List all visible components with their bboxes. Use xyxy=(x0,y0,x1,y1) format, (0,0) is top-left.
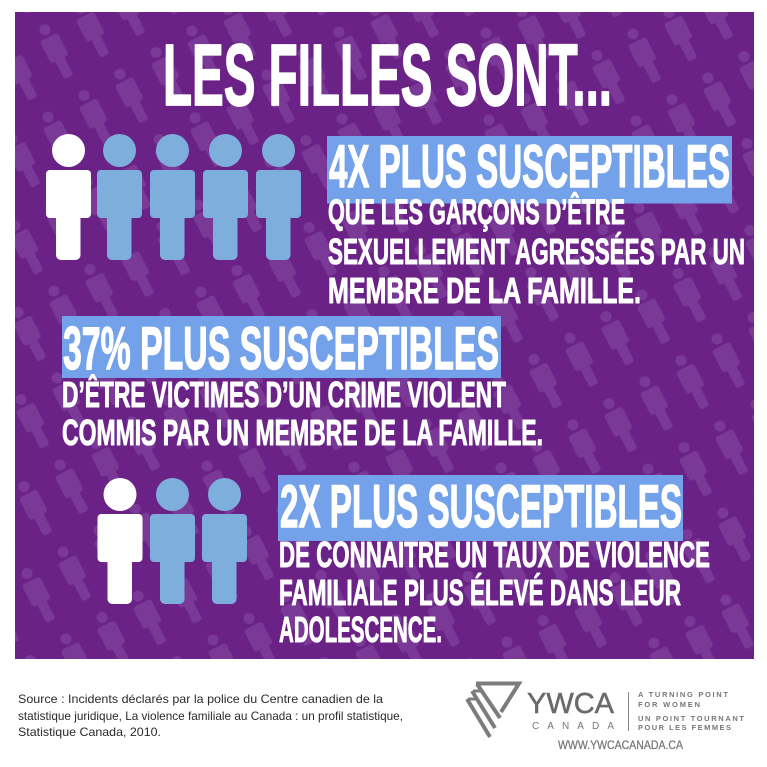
panel: statistic 2X: ADOLESCENCE. xyxy=(279,609,442,650)
icon: three people, one highlighted xyxy=(98,478,247,604)
logo divider xyxy=(628,692,629,731)
icon: logo triangle xyxy=(467,684,519,737)
logo tagline: UN POINT TOURNANT xyxy=(638,714,744,723)
logo: YWCA Canada xyxy=(467,684,744,752)
logo subtitle: CANADA xyxy=(532,721,614,732)
logo wordmark: YWCA xyxy=(527,688,615,720)
source text: Source : Incidents déclarés par la police du Centre canadien de la xyxy=(18,692,383,706)
panel: statistic 2X xyxy=(278,473,710,650)
icon: five people, one highlighted xyxy=(46,134,301,260)
source text xyxy=(18,692,403,739)
logo website: WWW.YWCACANADA.CA xyxy=(558,740,683,752)
logo tagline: A TURNING POINT xyxy=(638,690,728,699)
panel: statistic 4X: MEMBRE DE LA FAMILLE. xyxy=(328,270,641,311)
panel: statistic 37% xyxy=(62,315,543,453)
panel: statistic 37%: D’ÊTRE VICTIMES D’UN CRIME VIOLENT xyxy=(62,373,506,415)
source text: Statistique Canada, 2010. xyxy=(18,725,161,739)
logo tagline: POUR LES FEMMES xyxy=(638,723,731,732)
logo tagline xyxy=(638,690,744,732)
panel: statistic 4X xyxy=(327,133,745,311)
source text: statistique juridique, La violence familiale au Canada : un profil statistique, xyxy=(18,709,403,723)
logo tagline: FOR WOMEN xyxy=(638,700,700,709)
